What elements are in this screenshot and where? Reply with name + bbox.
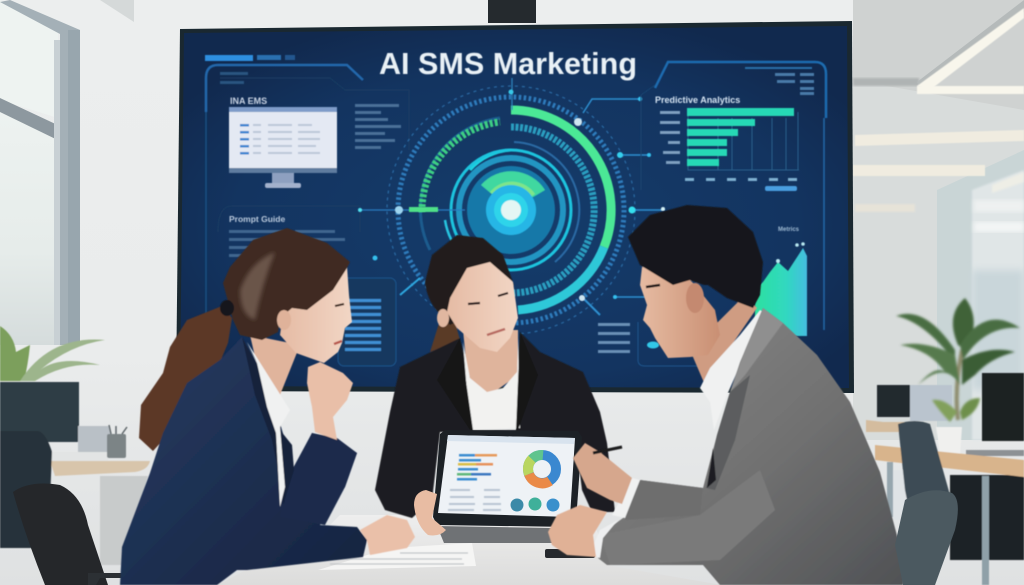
tablet bars (448, 454, 501, 511)
right office background: plant, desks, monitors (866, 298, 1024, 585)
raised sleeve (280, 433, 357, 525)
tablet (433, 430, 582, 543)
left window (0, 0, 134, 345)
radar gauge chart (387, 86, 635, 334)
ear (686, 283, 704, 313)
left decorative header bars (205, 55, 409, 360)
dark inner (707, 448, 716, 488)
face (640, 267, 720, 358)
area chart: Metrics (778, 227, 800, 233)
area chart (755, 227, 807, 336)
title: AI SMS Marketing (379, 47, 637, 81)
facial features (468, 293, 508, 304)
text list beside monitor (355, 104, 401, 149)
suit (598, 308, 903, 585)
plant (0, 326, 105, 381)
hand on table (360, 515, 415, 555)
lapels (437, 338, 473, 430)
panel: CMS monitor: INA EMS (230, 96, 267, 106)
person: hand of woman on tablet (414, 490, 446, 535)
blazer (375, 332, 615, 518)
tablet small charts (510, 498, 560, 512)
radar gauge core (467, 166, 555, 254)
neck (690, 295, 757, 385)
documents on table (318, 543, 476, 570)
hair (223, 228, 350, 340)
person: man on right (548, 205, 903, 585)
lower hand (548, 505, 607, 557)
ponytail (139, 306, 232, 451)
ear (437, 309, 449, 327)
panel: lower left module: Prompt Guide (229, 214, 285, 224)
office chair (0, 431, 52, 548)
eye and brow (646, 285, 660, 287)
monitor large (982, 373, 1024, 441)
foreground chair right (895, 490, 958, 585)
panel: predictive analysis bar chart: Predictive Analytics (655, 95, 740, 105)
hand at chin (307, 362, 353, 440)
lapel shade (242, 337, 285, 505)
monitor small (877, 385, 910, 417)
shirt (247, 342, 290, 507)
hair (628, 205, 763, 308)
module behind man (598, 322, 705, 366)
display screen (176, 21, 854, 393)
panel: CMS monitor (229, 96, 337, 188)
person: woman on left (120, 228, 415, 585)
hair tie (220, 300, 234, 316)
right side office background (853, 0, 1024, 440)
dark under-desk area (950, 475, 1024, 560)
hair (425, 235, 514, 325)
pen cup (107, 425, 127, 458)
panel: predictive analysis bar chart (641, 62, 826, 330)
pot (936, 427, 962, 456)
eye and lips (335, 304, 344, 306)
ceiling mount (488, 0, 536, 23)
face (280, 266, 352, 363)
office chair (898, 421, 950, 525)
connector lines and nodes (358, 78, 665, 315)
tablet screen (438, 435, 575, 517)
shirt (700, 310, 763, 430)
table (218, 515, 722, 585)
desk (50, 461, 150, 476)
lapel (730, 308, 783, 392)
screen surface (180, 26, 849, 388)
blazer (120, 337, 367, 585)
hand holding pen (573, 443, 632, 504)
shirt cuffs (612, 478, 640, 518)
left office background: plant, desk, monitor (0, 326, 150, 565)
panel: lower left module (218, 206, 396, 366)
plant (896, 298, 1020, 422)
monitor (0, 382, 79, 442)
screen frame (176, 21, 854, 393)
ear (277, 310, 291, 330)
upper forearm (625, 480, 703, 520)
shirt (463, 338, 520, 430)
neck (463, 330, 518, 395)
tablet donut chart (528, 455, 556, 483)
face (447, 262, 518, 352)
lower forearm shading (600, 470, 775, 565)
phone on table (545, 549, 595, 558)
back panel (78, 426, 110, 456)
foreground chair left (13, 484, 122, 585)
person: woman in middle (375, 235, 615, 518)
neck (250, 335, 300, 395)
tablet body (433, 430, 582, 527)
ponytail (430, 320, 460, 352)
tablet stand (437, 526, 552, 543)
desk (875, 445, 1024, 477)
